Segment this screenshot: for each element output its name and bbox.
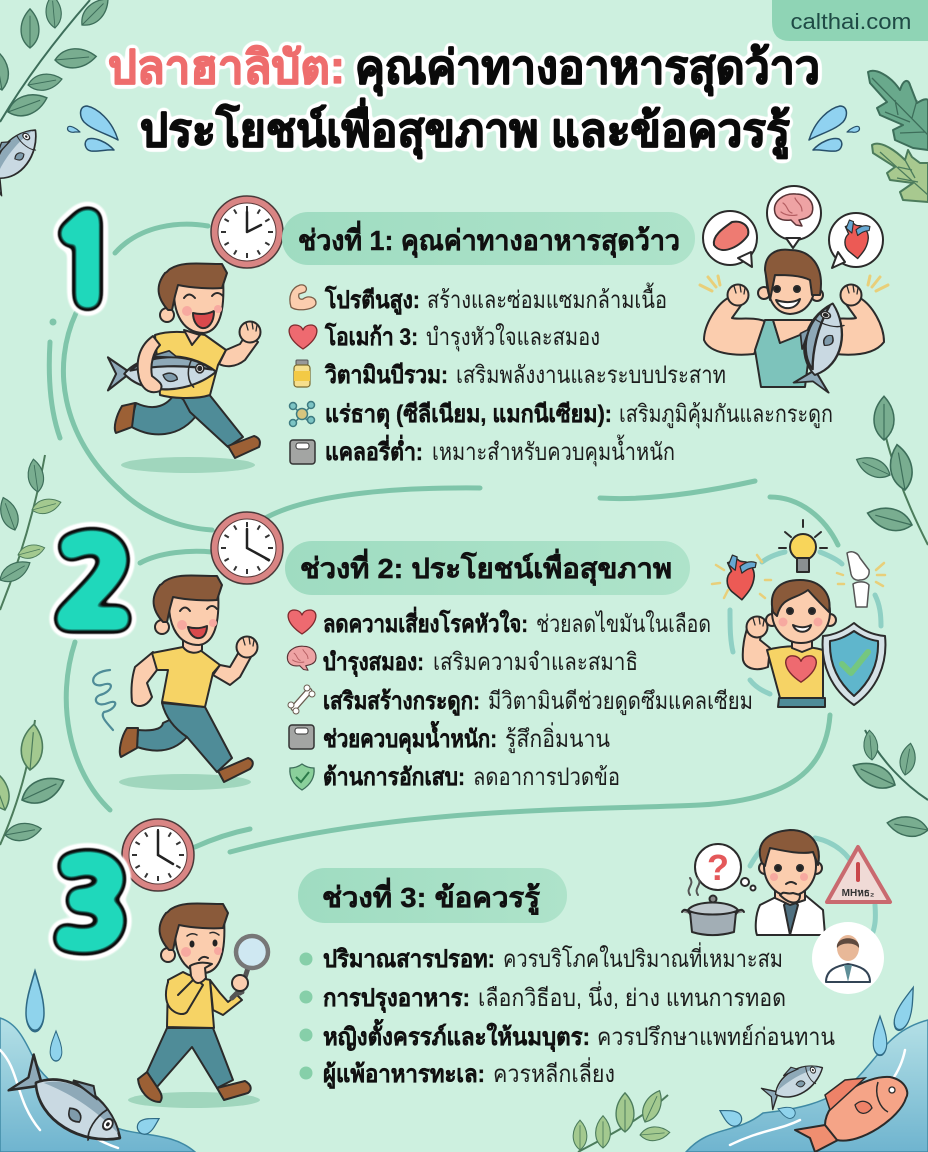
fish bottom left <box>9 1047 136 1152</box>
numeral 1: 1 <box>50 206 120 320</box>
icon: shield <box>290 764 314 790</box>
list section 3 <box>300 942 835 1089</box>
item: pregnancy: หญิงตั้งครรภ์และให้นมบุตร: <box>323 1018 590 1053</box>
item: protein: สร้างและซ่อมแซมกล้ามเนื้อ <box>427 282 667 314</box>
item: mercury <box>300 942 783 973</box>
header pill section 2: ช่วงที่ 2: ประโยชน์เพื่อสุขภาพ <box>300 548 672 586</box>
icon: muscle <box>290 285 316 310</box>
list section 1 <box>289 282 833 467</box>
numeral 2: 2 <box>55 528 135 642</box>
leaf cluster top right <box>868 71 928 202</box>
boy with shield, heart, bulb and knee <box>712 520 885 707</box>
site badge <box>772 0 928 41</box>
title: ประโยชน์เพื่อสุขภาพ และข้อควรรู้ <box>140 98 790 159</box>
item: mercury: ปริมาณสารปรอท: <box>323 946 495 973</box>
runner 2 <box>93 575 257 790</box>
item: heart risk <box>323 606 711 638</box>
icon: molecule <box>290 402 314 426</box>
runner with fish <box>108 263 261 473</box>
icon: vitamin bottle <box>294 360 310 387</box>
header pill section 1: ช่วงที่ 1: คุณค่าทางอาหารสุดว้าว <box>298 220 680 258</box>
item: omega 3 <box>324 322 600 352</box>
item: bones: เสริมสร้างกระดูก: <box>323 688 480 716</box>
item: low calorie: เหมาะสำหรับควบคุมน้ำหนัก <box>432 434 675 467</box>
leaf sprig right middle <box>853 396 928 545</box>
item: allergy <box>300 1057 615 1089</box>
water wave bottom left <box>0 1018 195 1152</box>
icon: heart <box>288 610 316 634</box>
item: brain: เสริมความจำและสมาธิ <box>433 649 638 676</box>
item: allergy: ควรหลีกเลี่ยง <box>493 1057 615 1088</box>
clock 2 <box>211 512 283 584</box>
item: brain: บำรุงสมอง: <box>323 649 424 678</box>
icon: scale <box>290 440 315 464</box>
leaf sprig bottom center <box>573 1087 670 1152</box>
muscle man with fish <box>700 186 888 393</box>
clock 3 <box>122 819 194 891</box>
small fish bottom right <box>759 1054 829 1110</box>
drops bottom right <box>716 985 920 1129</box>
item: cooking: เลือกวิธีอบ, นึ่ง, ย่าง แทนการทอด <box>478 981 786 1012</box>
item: weight: รู้สึกอิ่มนาน <box>505 722 610 754</box>
icon: scale <box>289 725 314 749</box>
numeral 3: 3 <box>54 849 128 963</box>
item: vitamin B <box>325 362 726 389</box>
water wave bottom right <box>686 1020 928 1152</box>
item: vitamin B: วิตามินบีรวม: <box>325 362 448 389</box>
icon: heart <box>289 325 317 349</box>
item: minerals: เสริมภูมิคุ้มกันและกระดูก <box>619 401 833 429</box>
item: protein <box>324 282 667 315</box>
fish top left <box>0 118 48 196</box>
item: brain <box>323 649 638 678</box>
item: inflammation <box>323 764 620 791</box>
item: heart risk: ช่วยลดไขมันในเลือด <box>536 610 711 638</box>
item: vitamin B: เสริมพลังงานและระบบประสาท <box>456 362 726 389</box>
leaf sprig left middle <box>0 455 63 610</box>
title <box>108 41 820 159</box>
water drops top right <box>809 106 859 151</box>
item: allergy: ผู้แพ้อาหารทะเล: <box>323 1061 485 1089</box>
header pill section 2 <box>285 541 690 595</box>
header pill section 3: ช่วงที่ 3: ข้อควรรู้ <box>322 877 540 915</box>
leaf sprig left lower <box>0 720 68 845</box>
walker with magnifier <box>128 903 268 1108</box>
item: inflammation: ต้านการอักเสบ: <box>323 764 465 791</box>
item: weight: ช่วยควบคุมน้ำหนัก: <box>323 720 497 755</box>
item: cooking: การปรุงอาหาร: <box>323 985 470 1014</box>
item: mercury: ควรบริโภคในปริมาณที่เหมาะสม <box>503 942 783 973</box>
orange fish bottom right <box>795 1077 907 1152</box>
item: pregnancy: ควรปรึกษาแพทย์ก่อนทาน <box>597 1023 835 1051</box>
winding path lines <box>49 224 838 852</box>
doctor with pot, warning and question <box>682 830 890 994</box>
title: คุณค่าทางอาหารสุดว้าว <box>355 41 820 96</box>
header pill section 1 <box>282 212 695 265</box>
item: bones: มีวิตามินดีช่วยดูดซึมแคลเซียม <box>488 688 753 716</box>
item: bones <box>323 688 753 716</box>
item: low calorie <box>325 434 675 467</box>
item: minerals <box>325 401 833 430</box>
item: low calorie: แคลอรี่ต่ำ: <box>325 434 423 466</box>
drops bottom left <box>26 971 163 1137</box>
header pill section 3 <box>298 868 567 923</box>
water drops top left <box>68 106 118 151</box>
clock 1 <box>211 196 283 268</box>
leaf sprig top left <box>0 0 114 122</box>
item: omega 3: บำรุงหัวใจและสมอง <box>426 323 600 352</box>
doctor with pot, warning and question: ? <box>707 847 729 888</box>
title: ปลาฮาลิบัต: <box>108 41 345 93</box>
item: cooking <box>300 981 786 1014</box>
item: minerals: แร่ธาตุ (ซีลีเนียม, แมกนีเซียม): <box>325 401 612 430</box>
list section 2 <box>287 606 753 791</box>
site badge: calthai.com <box>790 9 912 34</box>
item: protein: โปรตีนสูง: <box>324 285 420 315</box>
icon: brain <box>287 646 316 670</box>
item: inflammation: ลดอาการปวดข้อ <box>473 764 620 791</box>
doctor with pot, warning and question: MHหธ₂ <box>842 888 874 899</box>
leaf sprig right lower <box>849 730 928 839</box>
item: omega 3: โอเมก้า 3: <box>324 322 418 351</box>
item: heart risk: ลดความเสี่ยงโรคหัวใจ: <box>323 606 528 638</box>
item: pregnancy <box>300 1018 835 1053</box>
icon: bone <box>288 685 315 714</box>
item: weight <box>323 720 610 755</box>
